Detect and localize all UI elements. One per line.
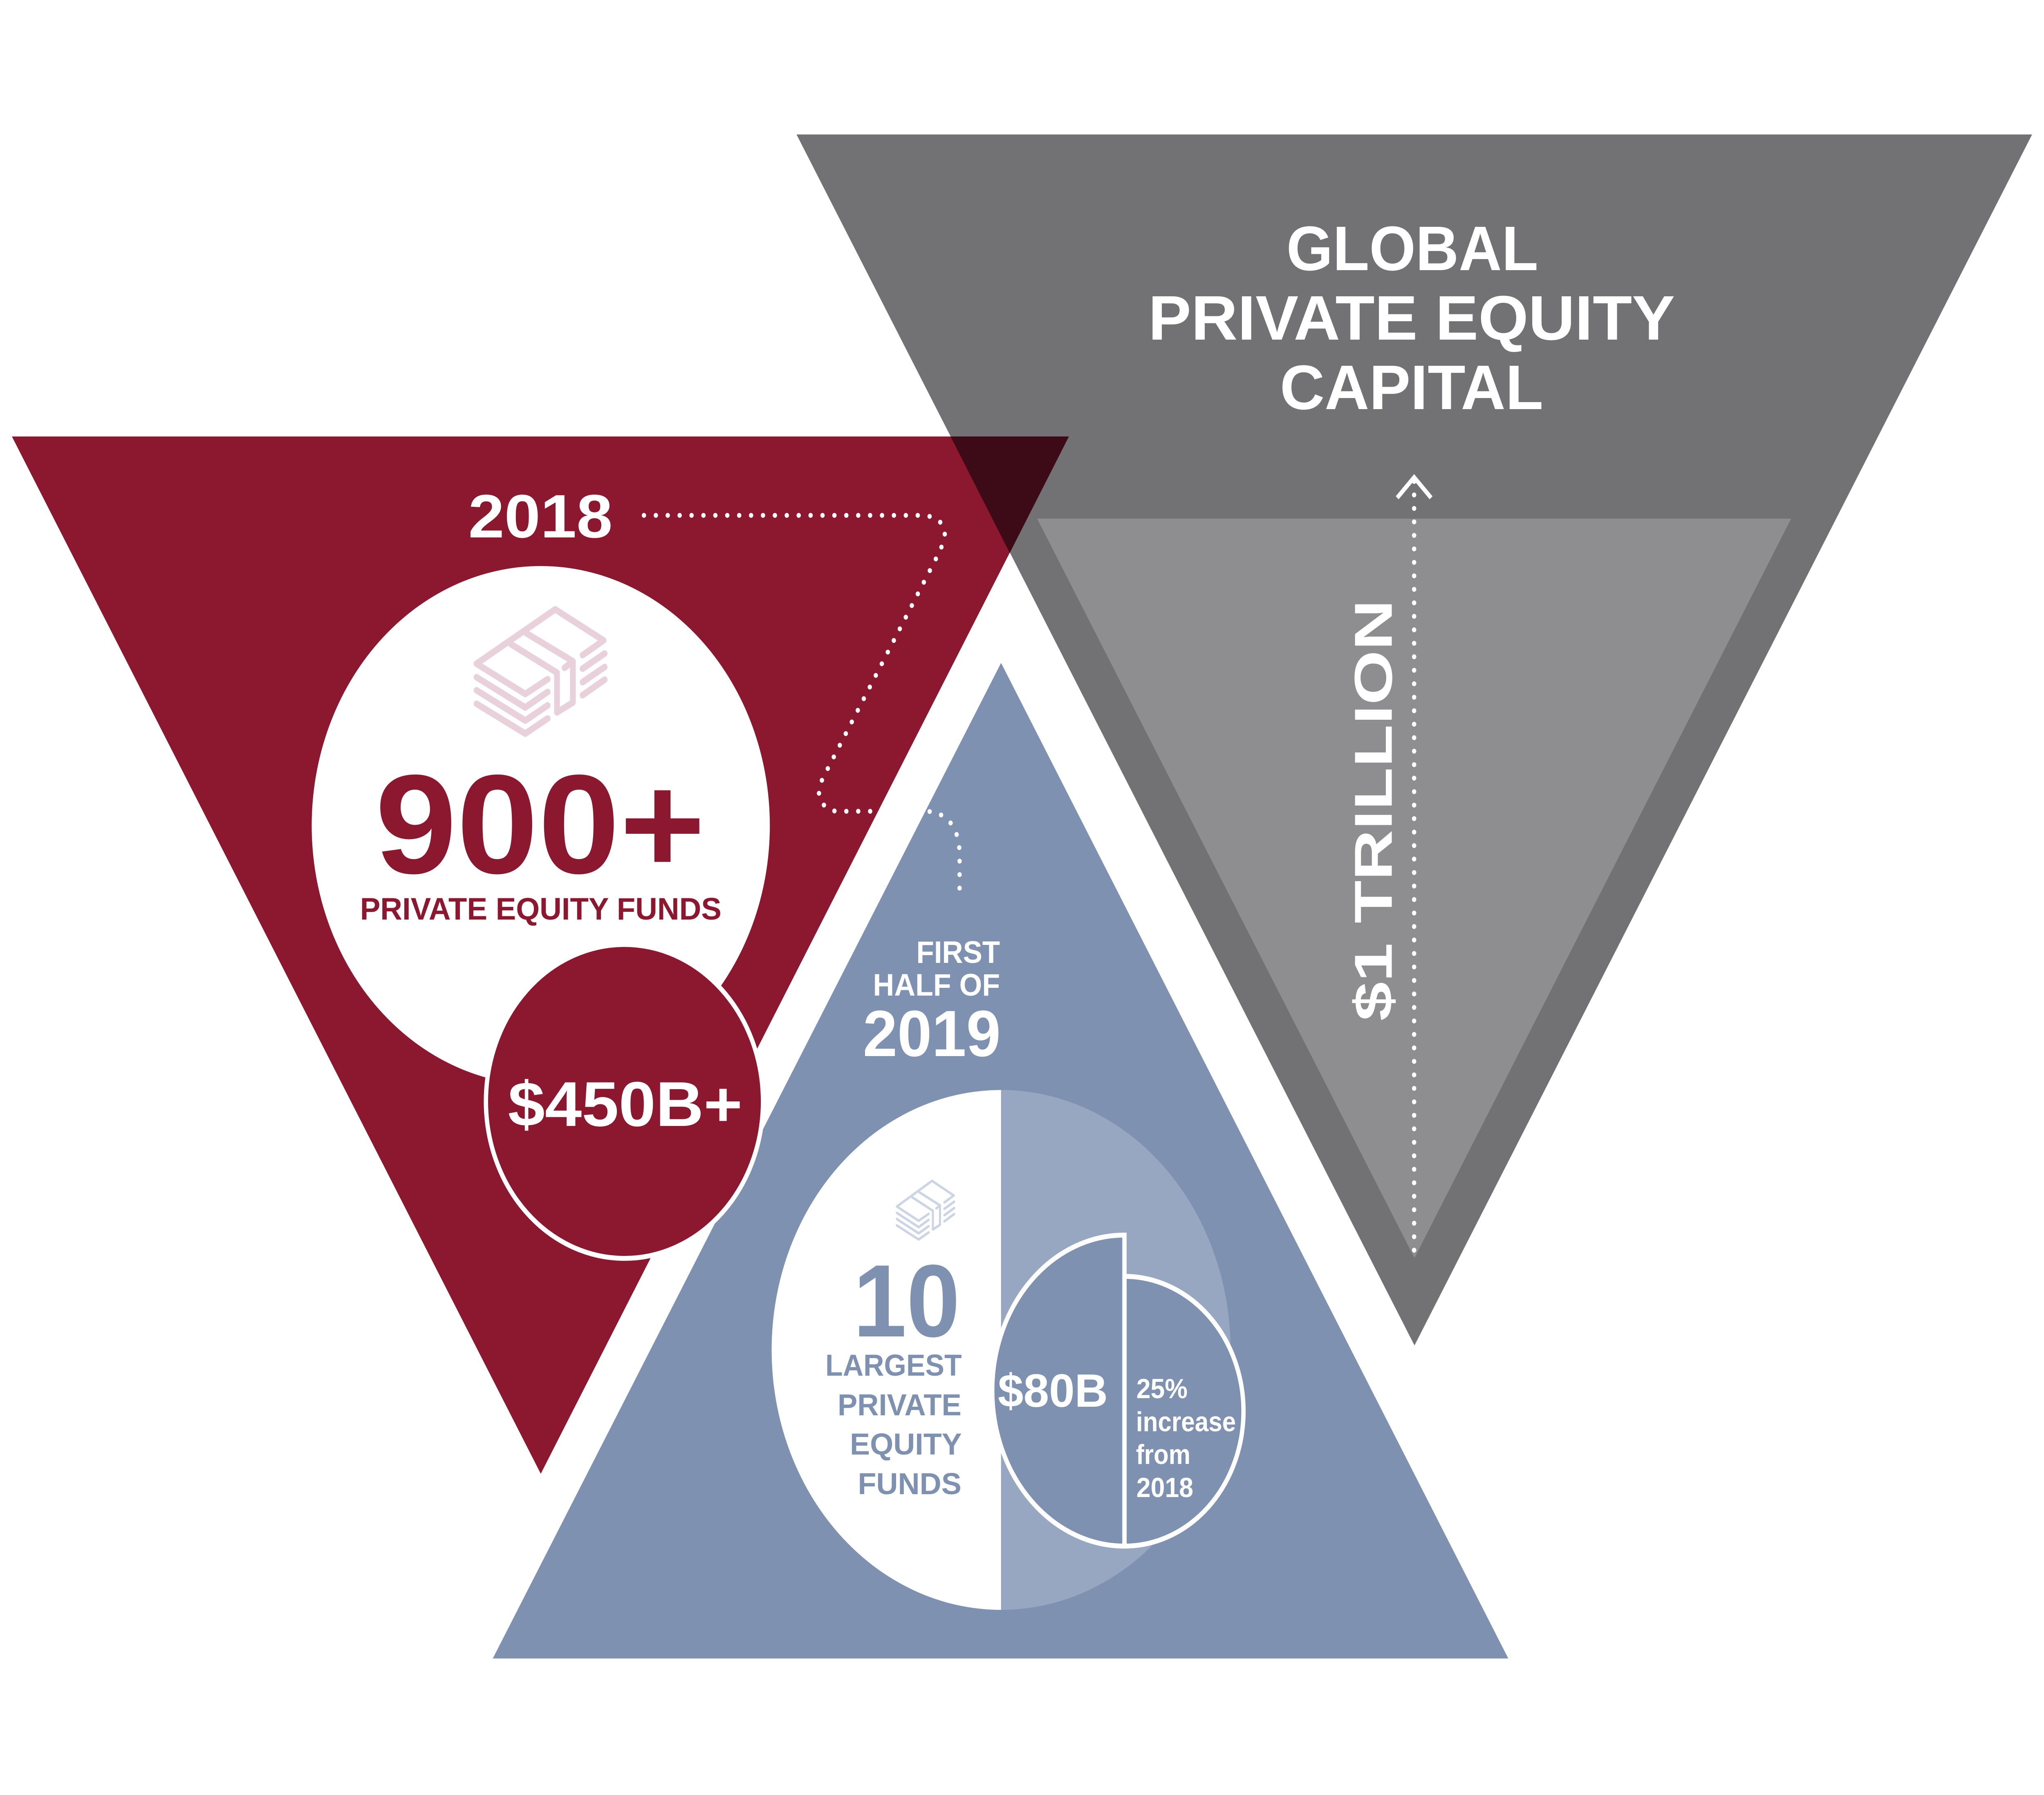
panel: 2019 split circle: [772, 1090, 1244, 1610]
arrow: dotted connector from 2018 to first half of 2019: [644, 515, 959, 899]
right half: 25% increase: [1125, 1276, 1244, 1546]
heading: global private equity capital: PRIVATE EQUITY: [1148, 283, 1675, 353]
white half circle: [772, 1090, 1001, 1610]
left half: $80B: [992, 1235, 1125, 1546]
label: largest private equity funds: EQUITY: [850, 1427, 962, 1461]
label: largest private equity funds: FUNDS: [858, 1467, 961, 1501]
text: 25% increase from 2018: 25%: [1136, 1373, 1188, 1404]
callout: $450B+ red circle: [486, 945, 763, 1258]
heading: global private equity capital: CAPITAL: [1280, 352, 1543, 423]
label: private equity funds: PRIVATE EQUITY FUNDS: [360, 892, 722, 927]
stat: 10: 10: [853, 1244, 960, 1359]
stat: 900+: 900+: [375, 745, 705, 903]
panel: 2018 red triangle: [12, 436, 1069, 1474]
text: 25% increase from 2018: 2018: [1136, 1472, 1193, 1503]
text: 25% increase from 2018: from: [1136, 1439, 1190, 1470]
label: $1 trillion: $1 TRILLION: [1344, 600, 1403, 1021]
icon: stack of cash: [477, 609, 605, 734]
outer gray triangle: [796, 134, 2032, 1345]
arrow: dotted vertical with chevron: [1397, 477, 1431, 1253]
text: 25% increase from 2018: [1136, 1373, 1236, 1503]
white circle: [312, 566, 770, 1085]
panel: global private equity capital triangle: [796, 134, 2032, 1345]
label: first half of 2019: HALF OF: [873, 968, 1000, 1003]
panel: white circle 900+ private equity funds: [312, 566, 770, 1085]
label: first half of 2019: FIRST: [916, 935, 1000, 970]
panel: first half of 2019 blue triangle: [493, 663, 1508, 1658]
heading: global private equity capital: [1148, 213, 1675, 423]
red circle with white ring: [486, 945, 763, 1258]
label: first half of 2019: [863, 935, 1001, 1070]
label: largest private equity funds: PRIVATE: [838, 1388, 961, 1422]
label: largest private equity funds: [825, 1348, 962, 1501]
label: largest private equity funds: LARGEST: [825, 1348, 962, 1382]
label: 2018: 2018: [468, 482, 612, 551]
stat: $450B+: $450B+: [508, 1069, 742, 1139]
overlap of red and gray triangles: [950, 436, 1069, 553]
text: 25% increase from 2018: increase: [1136, 1406, 1236, 1437]
inner lighter gray triangle: [1037, 519, 1791, 1258]
label: first half of 2019: 2019: [863, 997, 1001, 1070]
stat: $80B: $80B: [998, 1365, 1108, 1417]
pale blue half circle: [1001, 1090, 1230, 1610]
heading: global private equity capital: GLOBAL: [1286, 213, 1538, 284]
icon: small stack of cash: [897, 1181, 954, 1240]
